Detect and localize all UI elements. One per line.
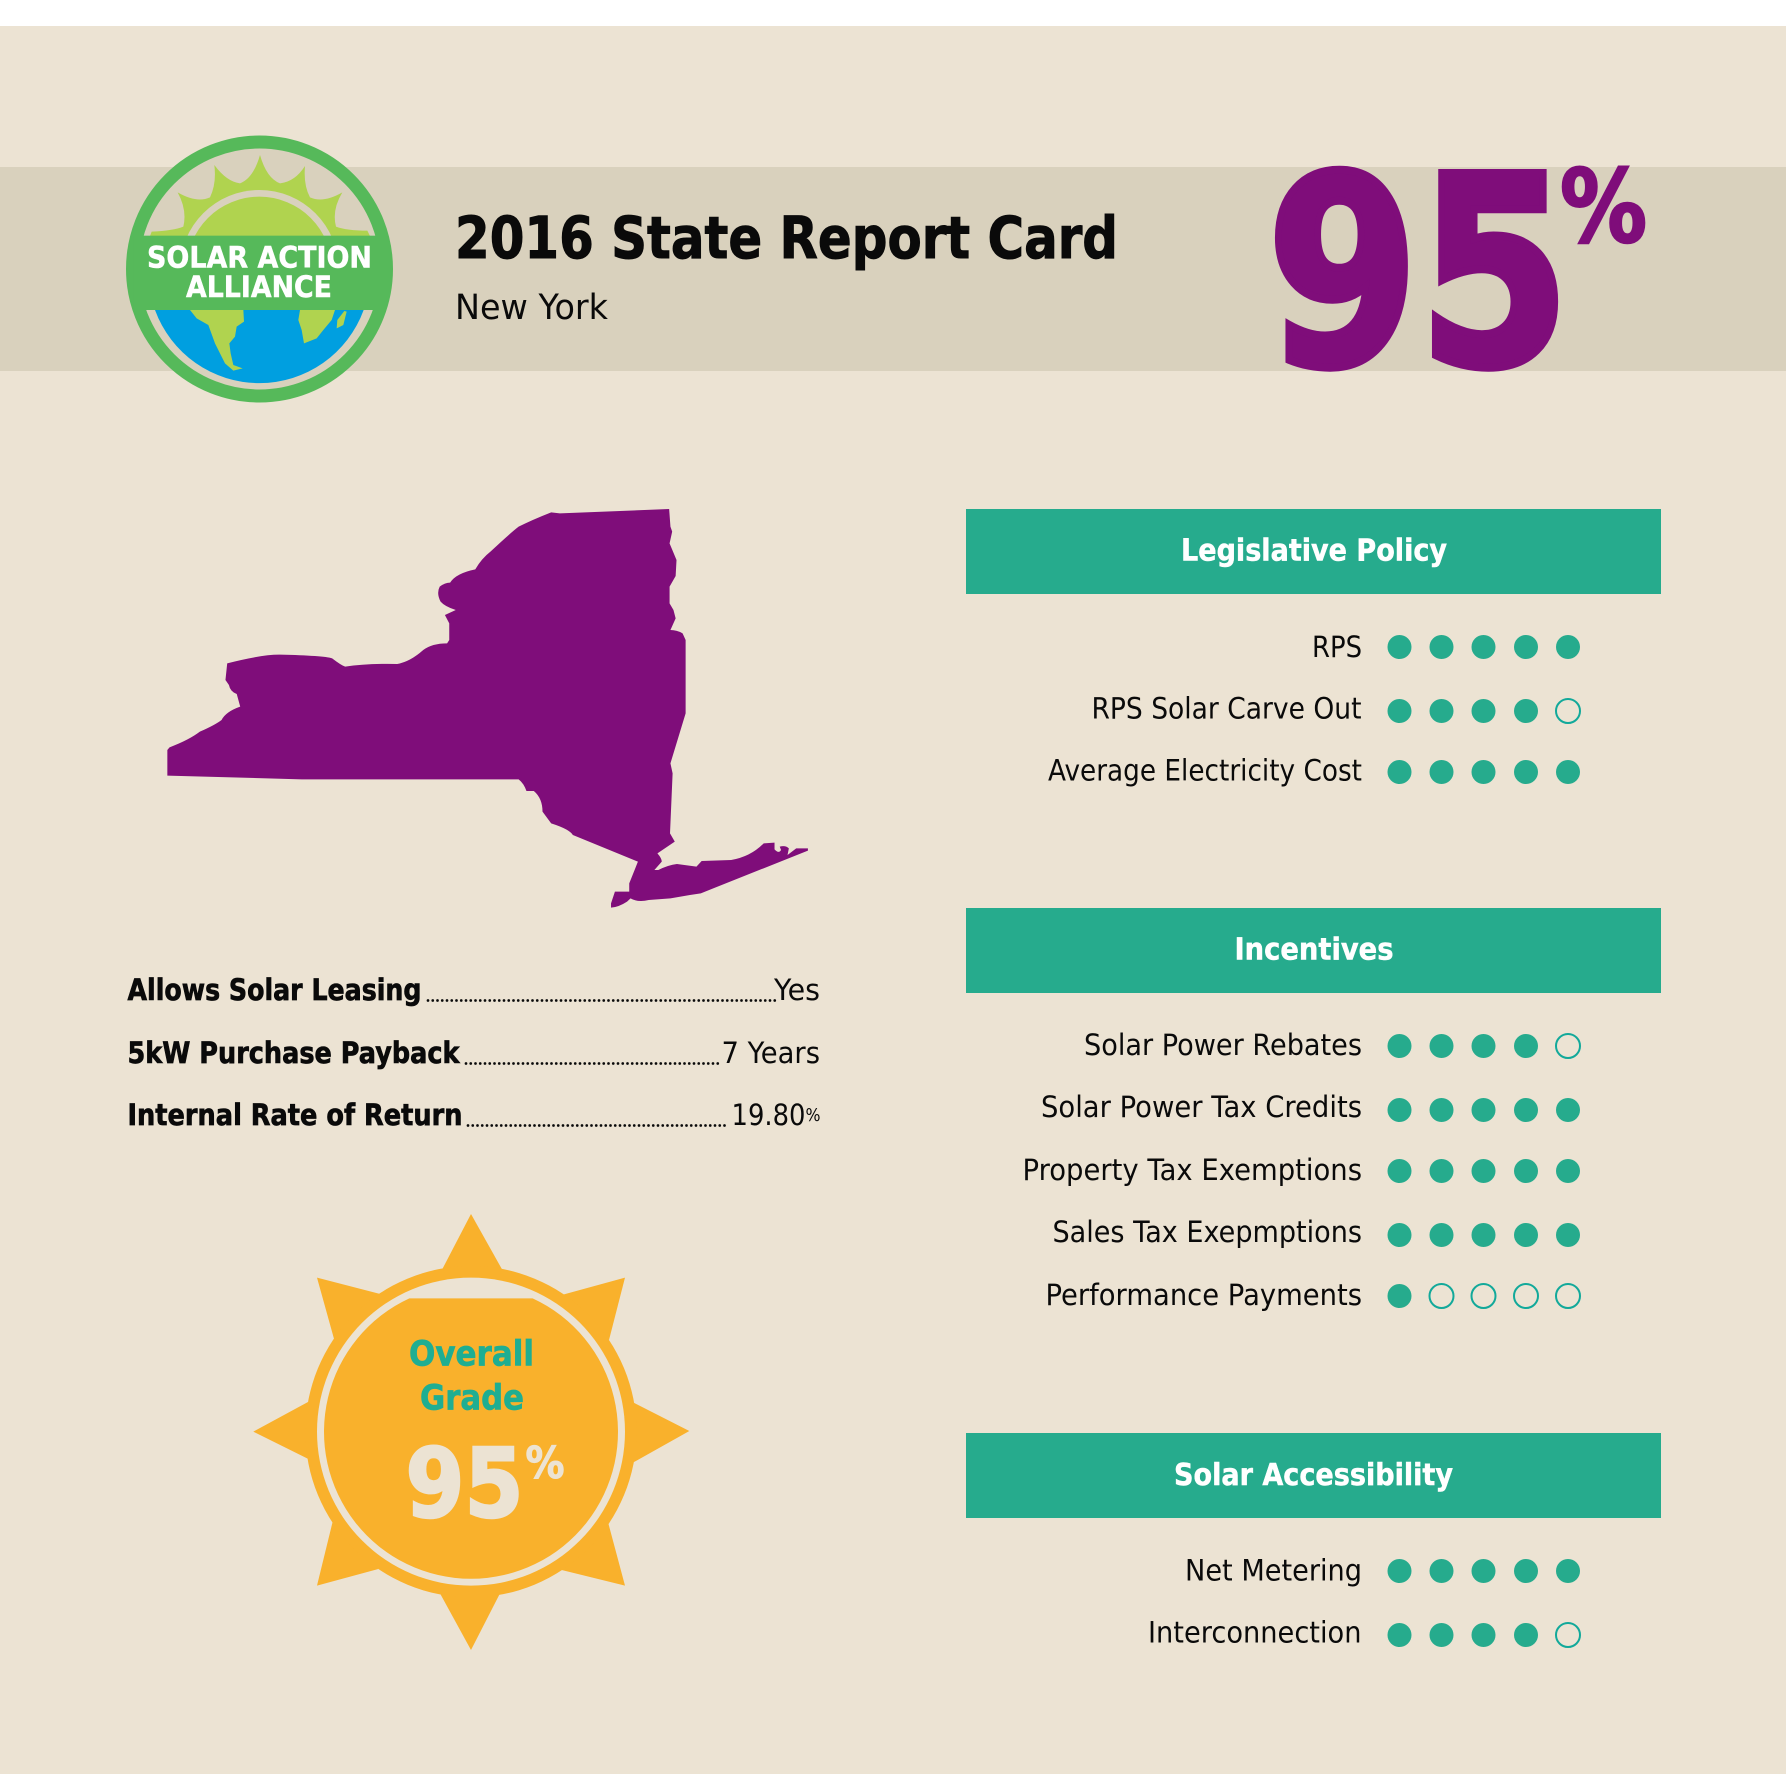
row: sales tax exemptions: [1052, 1215, 1580, 1249]
row: solar power tax credits: Solar Power Tax Credits: [1041, 1090, 1362, 1124]
row: sales tax exemptions: Sales Tax Exepmptions: [1052, 1215, 1362, 1249]
row: property tax exemptions: [1022, 1153, 1580, 1187]
header band: [0, 167, 1786, 371]
panel: incentives: [966, 908, 1661, 1312]
row: solar power rebates: Solar Power Rebates: [1084, 1028, 1362, 1062]
big score: %: [1560, 148, 1647, 266]
row: solar power tax credits: [1041, 1090, 1580, 1124]
row: interconnection: Interconnection: [1148, 1616, 1362, 1650]
row: interconnection: [1148, 1616, 1580, 1650]
stat: solar leasing: Allows Solar Leasing: [128, 973, 422, 1007]
stat: solar leasing: Yes: [773, 973, 820, 1007]
row: RPS solar carve out: [1092, 692, 1580, 726]
overall grade badge: Grade: [420, 1378, 524, 1418]
stat: purchase payback: [128, 1036, 820, 1070]
logo: Solar Action Alliance: SOLAR ACTION: [147, 240, 372, 274]
stat: purchase payback: 7 Years: [722, 1036, 820, 1070]
heading: incentives: Incentives: [1234, 932, 1394, 968]
stat: rate of return: 19.80: [732, 1098, 806, 1132]
stat: purchase payback: 5kW Purchase Payback: [128, 1036, 460, 1070]
row: RPS solar carve out: RPS Solar Carve Out: [1092, 692, 1362, 726]
heading: legislative policy: [966, 509, 1661, 594]
row: net metering: [1185, 1554, 1580, 1588]
stat: rate of return: %: [806, 1105, 820, 1126]
row: average electricity cost: [1048, 754, 1580, 788]
big score: 95: [1267, 121, 1570, 426]
heading: incentives: [966, 908, 1661, 993]
title: 2016 State Report Card: [455, 204, 1118, 272]
heading: solar accessibility: [966, 1433, 1661, 1518]
stats list: [128, 973, 820, 1132]
logo: Solar Action Alliance: [132, 142, 386, 396]
overall grade badge: %: [526, 1438, 564, 1489]
row: average electricity cost: Average Electricity Cost: [1048, 754, 1362, 788]
overall grade badge: 95: [406, 1430, 524, 1540]
row: solar power rebates: [1084, 1028, 1580, 1062]
overall grade badge: Overall: [409, 1334, 534, 1374]
panel: legislative policy: [966, 509, 1661, 788]
logo: Solar Action Alliance: ALLIANCE: [186, 270, 332, 304]
row: RPS: [1312, 630, 1580, 664]
row: net metering: Net Metering: [1185, 1554, 1362, 1588]
map: New York state: [167, 509, 808, 908]
row: RPS: RPS: [1312, 630, 1362, 664]
row: performance payments: [1046, 1278, 1580, 1312]
heading: legislative policy: Legislative Policy: [1181, 534, 1447, 568]
subtitle: state name: New York: [455, 288, 609, 328]
stat: rate of return: [128, 1098, 820, 1132]
heading: solar accessibility: Solar Accessibility: [1174, 1458, 1453, 1493]
stat: rate of return: Internal Rate of Return: [128, 1098, 462, 1132]
row: property tax exemptions: Property Tax Exemptions: [1022, 1153, 1362, 1187]
stat: solar leasing: [128, 973, 820, 1007]
overall grade badge: [253, 1214, 689, 1650]
row: performance payments: Performance Payments: [1046, 1278, 1362, 1312]
panel: solar accessibility: [966, 1433, 1661, 1650]
